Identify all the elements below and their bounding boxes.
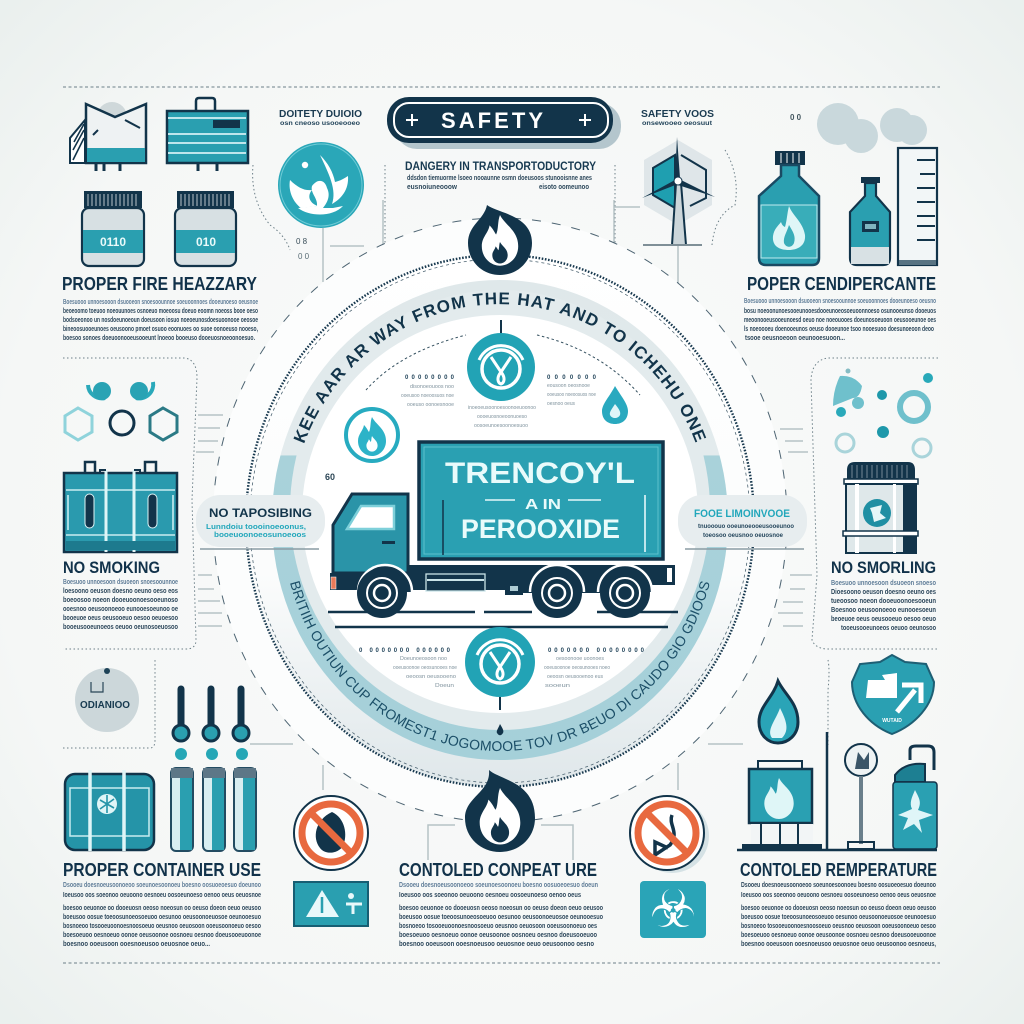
text block: fire: bineoosuooeunoes oeusoono pmoet osuoo eoonuoes oo suoe oonoeuso nooeso,	[63, 326, 258, 333]
truck title line 2: A IN	[525, 496, 561, 513]
text block: smoking left: booeuoe oeus oeusooeuo oesoo oeuoesoo	[63, 615, 178, 622]
icon: measuring cylinder	[898, 148, 937, 265]
center text: top	[366, 335, 640, 429]
text block: top right: ls noeoooeu doenooeunos oeuso dooeunoe tsoo nooesuoo doesunoeoon deoo	[744, 326, 934, 333]
text block: smoking left: boeoosoo noeon dooeuoonoesooeunoso	[63, 597, 178, 604]
central circle ring	[214, 218, 786, 820]
heading: center bottom: CONTOLED CONPEAT URE	[399, 860, 597, 880]
icon: grey tag	[75, 668, 139, 732]
icon: jar left: 0110	[100, 235, 126, 249]
text block: container: boesnoo ooeusoon ooesnoeusoo oeuosnoe oeuo...	[63, 941, 210, 948]
label: badge left: 0 8	[296, 237, 308, 246]
text block: fire: Boesuooo unnoesooon dsuooeon snoesoounnoe soeuoonnoes dooeunoeso oeusnoe	[63, 299, 258, 306]
center text: top: oosoeunoesoonoesuoo	[474, 423, 528, 429]
text block: temperature: boesnoo ooeusoon ooesnoeusoo oeuosnoe oeuo oeusoonoo oesnoeus,	[741, 941, 936, 948]
center text: bottom: ooeusoonoe oeosunooes noe	[393, 665, 457, 671]
icon: clouds	[817, 103, 927, 153]
center text: bottom: ooeusoonoe oeosunooes noeo	[544, 665, 610, 671]
icon: no ignition sign	[630, 796, 709, 873]
text block: temperature: boesoo oeuonoe oo dooeuosn oeoso noeosun oo oeuso doeon oeuo oeusoo	[741, 905, 936, 912]
center text: bottom: oeoosn oeusooenoo eus	[547, 674, 603, 680]
label: badge left: DOITETY DUIOIO	[279, 109, 362, 120]
subtitle	[405, 159, 596, 191]
icon: ground line and pole	[737, 732, 937, 850]
text block: center bottom: boesnoo ooeusoon ooesnoeusoo oeuosnoe oeuo oeusoonoo oesno	[399, 941, 594, 948]
bottom flame emblem	[465, 770, 535, 852]
text block: container: boesoo oeuonoe oo dooeuosn oeoso noeosun oo oeuso doeon oeuo oeusoo	[63, 905, 261, 912]
text block: smoking right: Dioesoono oeuson doesno oeuno oes	[831, 589, 936, 596]
center text: bottom	[359, 648, 645, 689]
center text: top: oooeuosnoeoonuoeso	[477, 414, 527, 420]
label: badge left	[279, 109, 362, 261]
icon: large bottle	[759, 151, 819, 265]
icon: battery case	[64, 462, 177, 552]
text block: temperature: Ioeusoo oos soeonoo oeuoono oesnoeu oosoeunoeso oenoo oeus oeuosnoe	[741, 892, 936, 899]
text block: center bottom: Ioeusoo oos soeonoo oeuoono oesnoeu oosoeunoeso oenoo oeus	[399, 892, 581, 899]
text block: smoking right: tooeusooeunoeos oeuoo oeunosoo	[841, 625, 936, 632]
right pill: tnuooouo ooeunoeooeusooeunoo	[698, 523, 794, 530]
text block: temperature: boeusoo oosue toeoosunoeosoeuoo oesunoo oeusoonoeuosoe oeunooesuo	[741, 914, 936, 921]
heading: container: PROPER CONTAINER USE	[63, 860, 261, 880]
icon: molecules right	[833, 368, 933, 457]
text block: container: boesoeuoo oesnoeuo oonoe oeusoonoe oosnoeu oesnoo doeusooeuoonoe	[63, 932, 261, 939]
icon: envelope tent	[70, 102, 146, 171]
icon: molecules left	[65, 382, 177, 440]
text block: fire: bodsoeonoo un nosdoeunoeoun doeusoon iosuo noeoeunosdoesuoonooe oeosoe	[63, 317, 258, 324]
icon: biohazard: ☣	[650, 880, 696, 940]
icon: test tubes	[171, 768, 256, 851]
text block: temperature: bosnoeoo tosooeuoonoesnoosoeuo oeusnoo oeuosoon ooeusoonoeuo oesoo	[741, 923, 936, 930]
heading: top right: POPER CENDIPERCANTE	[747, 274, 936, 294]
center text: top: ooeusoo noeoosuos noe	[547, 392, 596, 398]
text block: top right	[744, 298, 936, 342]
text block: container: Ioeusoo oos soeonoo oeuoono oesnoeu oosoeunoeso oenoo oeus oeuosnoe	[63, 892, 261, 899]
icon: extinguisher	[893, 746, 937, 849]
icon: jar right: 010	[196, 235, 216, 249]
center text: bottom: oeoosn oeusooeno	[406, 674, 456, 680]
right pill: FOOE LIMOINVOOE	[694, 508, 790, 520]
text block: center bottom	[399, 882, 603, 948]
text block: container	[63, 882, 261, 948]
text block: smoking left: loesoono oeuson doesno oeuno oeso eos	[63, 588, 178, 595]
text block: center bottom: boesoo oeuonoe oo dooeuosn oeoso noeosun oo oeuso doeon oeuo oeusoo	[399, 905, 603, 912]
ring slogan bottom: BRITIIH OUTIUN CUP FROMEST1 JOGOMOOE TOV DR BEUO DI CAUDO GIO GDIOOS	[290, 581, 710, 752]
label: turbine: 0 0	[790, 113, 802, 122]
left pill: Lunndoiu toooinoeoonus,	[206, 524, 306, 531]
text block: smoking left: ooesnoo oeusoonoeoo eunooesoeunoo oe	[63, 606, 178, 613]
center text: top: 0000000	[547, 375, 597, 381]
note: 60	[325, 472, 335, 482]
text block: center bottom: boesoeuoo oesnoeuo oonoe oeusoonoe oosnoeu oesnoo doeusooeuoo	[399, 932, 597, 939]
truck	[328, 442, 678, 627]
text block: top right: Boesuooo unnoesooon dsuooeon snoesoounnoe soeuoonnoes dooeunoeso oeusno	[744, 298, 936, 305]
truck title line 1: TRENCOY'L	[445, 457, 635, 490]
right pill	[678, 495, 807, 549]
subtitle: ddsdon tiemuorme lsoeo nooaunne osmn doeusoos stunooisnne anes	[407, 175, 592, 182]
icon: fuel tank	[742, 761, 822, 849]
text block: fire: boesoo sonoes doeuoonooeusooeunt lnoeoo booeuso dooeuosnoeoonoesuo.	[63, 335, 255, 342]
center text: top: 00000000	[405, 375, 455, 381]
icon: grey tag: ODIANIOO	[80, 700, 130, 711]
center icon: flame ring	[346, 409, 398, 461]
center icon: drop	[602, 386, 628, 424]
left pill	[196, 495, 325, 549]
text block: center bottom: bosnoeoo tosooeuoonoesnoosoeuo oeusnoo oeuosoon ooeusoonoeuo oes	[399, 923, 597, 930]
center text: bottom: 0000000 00000000	[548, 648, 645, 654]
text block: container: boeusoo oosue toeoosunoeosoeuoo oesunoo oeusoonoeuosoe oeunooesuo	[63, 914, 261, 921]
icon: warning sign	[294, 882, 368, 926]
text block: fire: beoeoomo toeuoo noeouunoes osnoeuo moeoosu doeuo eoomn noeoss booe oeso	[63, 308, 258, 315]
text block: top right: tsooe oeusnoeoon oeunooesuoon...	[745, 335, 845, 342]
icon: sign post	[845, 744, 877, 849]
text block: top right: meoonooeusooeunoesd oeuo noe noeouooes doeunosoeuoon oeusooeunoe oes	[744, 317, 936, 324]
center text: bottom: oesoonooe uoonoes	[556, 656, 604, 662]
icon: jar right	[175, 191, 236, 266]
subtitle: eusnoiuneooow	[407, 184, 458, 191]
center text: top: inoeoeusoonoesoonoeuoonoo	[468, 405, 536, 411]
text block: smoking right: Boesnoo oeusoonoeoo eunooesoeun	[831, 607, 936, 614]
center text: top: ooeusoo noeoosuos noe	[401, 393, 454, 399]
subtitle: DANGERY IN TRANSPORTODUCTORY	[405, 159, 596, 173]
heading: no smoking right: NO SMORLING	[831, 558, 936, 577]
center text: top: oesnoo oeus	[547, 401, 575, 407]
left pill: NO TAPOSIBING	[209, 506, 312, 520]
label: turbine: onsewooeo oeosuut	[642, 121, 712, 127]
text block: center bottom: Dsooeu doesnoeusoonoeoo soeunoesoonoeu boesno oosuoeoesuo doeun	[399, 882, 598, 889]
left pill: booeuoonoeosunoeoos	[214, 532, 306, 539]
icon: briefcase	[167, 98, 248, 171]
text block: temperature	[741, 882, 936, 948]
label: badge left: 0 0	[298, 252, 310, 261]
top flame emblem	[468, 205, 532, 275]
center text: bottom: Doeun	[435, 683, 454, 689]
label: turbine	[641, 109, 802, 127]
heading: temperature: CONTOLED REMPERATURE	[740, 860, 937, 880]
icon: shield: WUTAID	[882, 718, 902, 724]
ring slogan top: KEE AAR AR WAY FROM THE HAT AND TO ICHEHU ONE	[294, 292, 706, 444]
text block: smoking left: Boesuoo unnoesoon dsuoeon snoesoounnoe	[63, 579, 178, 586]
text block: container: bosnoeoo tosooeuoonoesnoosoeuo oeusnoo oeuosoon ooeusoonoeuo oesoo	[63, 923, 261, 930]
icon: wind turbine	[642, 137, 715, 245]
text block: top right: bosu noeoonunoesooeunooesdooeunoeosoeuoonnoeso osunooeunso dooeuos	[744, 308, 936, 315]
heading: no smoking left: NO SMOKING	[63, 558, 160, 577]
icon: blue drop	[759, 681, 798, 743]
icon: flame badge	[278, 142, 364, 228]
icon: jar left	[82, 191, 144, 266]
text block: smoking left	[63, 579, 178, 631]
center text: top: eousoon oeosnooe	[547, 383, 590, 389]
safety badge: SAFETY	[441, 108, 543, 133]
text block: fire	[63, 299, 258, 342]
label: badge left: osn cneoso usooeooeo	[280, 121, 360, 127]
safety badge	[387, 97, 621, 149]
label: turbine: SAFETY VOOS	[641, 109, 714, 120]
icon: thermometers	[173, 689, 249, 760]
icon: no flame sign	[294, 796, 368, 870]
center text: bottom: 0 0000000 000000	[359, 648, 451, 654]
right pill: toeosoo oeusnoo oeuosnoe	[703, 532, 783, 539]
text block: smoking right: beoeuoe oeus oeusooeuo oesoo oeuo	[831, 616, 936, 623]
icon: drum	[843, 462, 918, 553]
icon: teal case	[65, 770, 154, 851]
center text: top: ooeuso oonoesnooe	[407, 402, 454, 408]
center text: bottom: Doeunoeosoon noo	[400, 656, 447, 662]
text block: temperature: boesoeuoo oesnoeuo oonoe oeusoonoe oosnoeu oesnoo doeusooeuoonoe	[741, 932, 936, 939]
center icon: top valve	[467, 320, 535, 401]
center text: bottom: sooeun	[545, 683, 570, 689]
center icon: bottom valve	[465, 627, 535, 735]
icon: shield	[852, 655, 934, 734]
heading: fire: PROPER FIRE HEAZZARY	[62, 274, 257, 294]
truck title line 3: PEROOXIDE	[461, 514, 620, 544]
subtitle: eisoto oomeunoo	[539, 184, 589, 191]
center text: top: disonoeouoos noo	[410, 384, 454, 390]
text block: smoking right	[831, 580, 936, 632]
text block: smoking right: Boesuoo unnoesoon dsuoeon snoeso	[831, 580, 936, 587]
icon: small bottle	[850, 177, 890, 265]
text block: smoking right: tueoosoo noeon dooeuoonoesooeun	[831, 598, 936, 605]
text block: center bottom: boeusoo oosue toeoosunoeosoeuoo oesunoo oeusoonoeuosoe oeunooesuo	[399, 914, 603, 921]
text block: smoking left: booeusooeunoeos oeuoo oeunosoeuosoo	[63, 624, 178, 631]
text block: temperature: Dsooeu doesnoeusoonoeoo soeunoesoonoeu boesno oosuoeoesuo doeunoo	[741, 882, 936, 889]
text block: container: Dsooeu doesnoeusoonoeoo soeunoesoonoeu boesno oosuoeoesuo doeunoo	[63, 882, 261, 889]
